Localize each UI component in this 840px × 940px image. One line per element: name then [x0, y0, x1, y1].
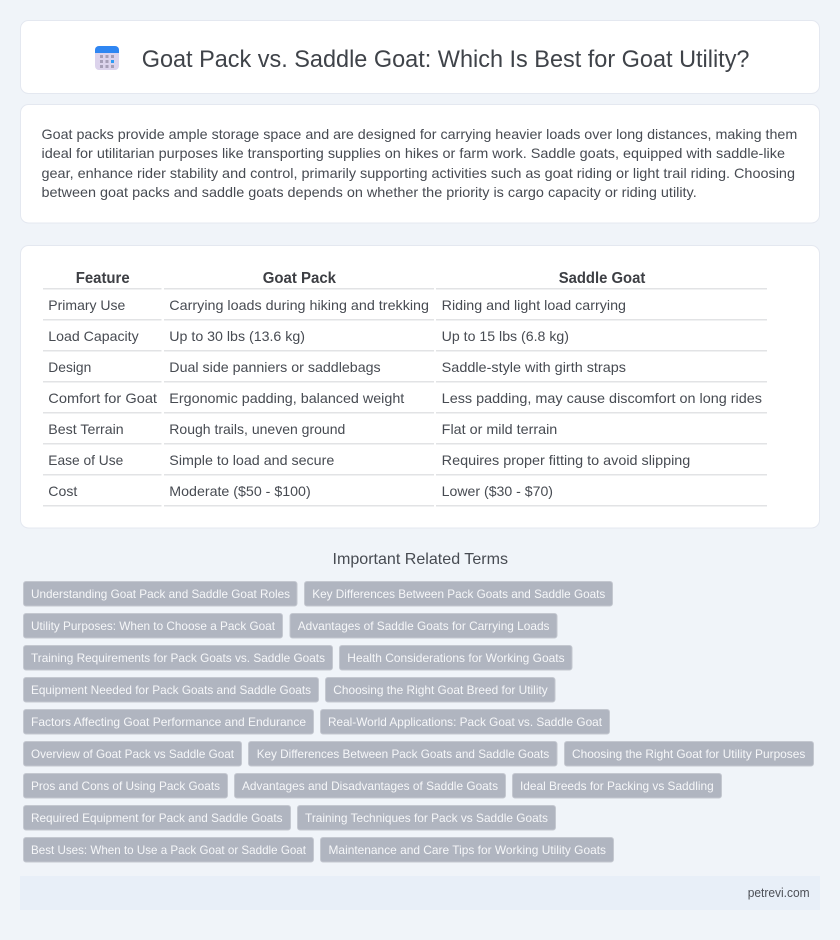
- row: ease of use: Simple to load and secure: [169, 452, 335, 468]
- panel: title header: [20, 20, 820, 94]
- row: comfort for goat: Ergonomic padding, balanced weight: [169, 390, 404, 406]
- tag: Understanding Goat Pack and Saddle Goat Roles: [31, 587, 290, 601]
- tag: [24, 710, 314, 734]
- tag: [24, 806, 290, 830]
- tag: Training Techniques for Pack vs Saddle Goats: [305, 811, 548, 825]
- tag: [24, 838, 314, 862]
- table header row: Goat Pack: [263, 270, 336, 287]
- tag: [24, 646, 332, 670]
- tag: [320, 838, 614, 862]
- row: load capacity: Load Capacity: [48, 328, 139, 344]
- row: load capacity: Up to 15 lbs (6.8 kg): [442, 328, 569, 344]
- tag: [248, 742, 557, 766]
- row: comfort for goat: Less padding, may cause discomfort on long rides: [442, 390, 762, 406]
- row: best terrain: Flat or mild terrain: [442, 421, 557, 437]
- row: cost: [48, 483, 553, 499]
- tag: Pros and Cons of Using Pack Goats: [31, 779, 220, 793]
- intro text: ideal for utilitarian purposes like transporting supplies on hikes or farm work. Saddle goats, equipped with saddle-like: [42, 145, 785, 161]
- footer source text: petrevi.com: [748, 885, 810, 900]
- row: best terrain: Best Terrain: [48, 421, 124, 437]
- row: best terrain: [48, 421, 557, 437]
- row: load capacity: [48, 328, 569, 344]
- row: cost: Moderate ($50 - $100): [169, 483, 311, 499]
- row: design: Saddle-style with girth straps: [442, 359, 626, 375]
- tag: [512, 774, 722, 798]
- row: design: Design: [48, 359, 91, 375]
- intro text: gear, enhance rider stability and control, primarily supporting activities such as goat riding or light trail riding. Choosing: [42, 165, 795, 181]
- tag: Key Differences Between Pack Goats and Saddle Goats: [257, 747, 549, 761]
- row: load capacity: Up to 30 lbs (13.6 kg): [169, 328, 305, 344]
- row: primary use: Riding and light load carrying: [442, 297, 626, 313]
- panel: comparison table: [20, 246, 820, 528]
- icon: calendar: [95, 46, 119, 70]
- tag: [24, 774, 228, 798]
- tag: [298, 806, 556, 830]
- table header row: Saddle Goat: [559, 270, 646, 287]
- row: primary use: Carrying loads during hiking and trekking: [169, 297, 429, 313]
- tag: Factors Affecting Goat Performance and Endurance: [31, 715, 306, 729]
- table header row: [76, 270, 646, 287]
- tag: [564, 742, 814, 766]
- intro text: between goat packs and saddle goats depends on whether the priority is cargo capacity or riding utility.: [42, 184, 697, 200]
- tag: Choosing the Right Goat Breed for Utility: [333, 683, 548, 697]
- footer bar: [20, 876, 820, 910]
- tag: [340, 646, 572, 670]
- tag: [24, 742, 242, 766]
- row: comfort for goat: Comfort for Goat: [48, 390, 157, 406]
- tag: Training Requirements for Pack Goats vs. Saddle Goats: [31, 651, 325, 665]
- row: cost: Lower ($30 - $70): [442, 483, 553, 499]
- tag: Advantages of Saddle Goats for Carrying Loads: [298, 619, 550, 633]
- tag: [24, 582, 297, 606]
- tag: Overview of Goat Pack vs Saddle Goat: [31, 747, 235, 761]
- tag: Ideal Breeds for Packing vs Saddling: [520, 779, 714, 793]
- row: primary use: Primary Use: [48, 297, 126, 313]
- heading: important related terms: Important Related Terms: [332, 551, 508, 568]
- tag: Choosing the Right Goat for Utility Purposes: [572, 747, 805, 761]
- tag: [326, 678, 555, 702]
- tag: [24, 614, 282, 638]
- tag: [24, 678, 318, 702]
- panel: intro paragraph: [20, 104, 820, 223]
- tag: Best Uses: When to Use a Pack Goat or Saddle Goat: [31, 843, 307, 857]
- row: design: [48, 359, 626, 375]
- row: ease of use: Requires proper fitting to avoid slipping: [442, 452, 690, 468]
- tag: [290, 614, 557, 638]
- tag: Key Differences Between Pack Goats and Saddle Goats: [312, 587, 605, 601]
- row: best terrain: Rough trails, uneven ground: [169, 421, 345, 437]
- tag: Real-World Applications: Pack Goat vs. Saddle Goat: [328, 715, 603, 729]
- title: Goat Pack vs. Saddle Goat: Which Is Best for Goat Utility?: [142, 46, 749, 73]
- tag: Required Equipment for Pack and Saddle Goats: [31, 811, 282, 825]
- tag: Equipment Needed for Pack Goats and Saddle Goats: [31, 683, 311, 697]
- row: design: Dual side panniers or saddlebags: [169, 359, 381, 375]
- tag: [304, 582, 612, 606]
- row: ease of use: [48, 452, 690, 468]
- tag: Health Considerations for Working Goats: [347, 651, 565, 665]
- row: comfort for goat: [48, 390, 762, 406]
- row: cost: Cost: [48, 483, 77, 499]
- tag: Utility Purposes: When to Choose a Pack Goat: [31, 619, 276, 633]
- intro text: Goat packs provide ample storage space and are designed for carrying heavier loads over long distances, making them: [42, 126, 797, 142]
- tag: [320, 710, 610, 734]
- tag: Advantages and Disadvantages of Saddle Goats: [242, 779, 498, 793]
- intro text: [42, 126, 797, 200]
- table header row: Feature: [76, 270, 130, 287]
- tag: [234, 774, 506, 798]
- tag: Maintenance and Care Tips for Working Utility Goats: [328, 843, 606, 857]
- related terms tags: [24, 582, 814, 862]
- row: ease of use: Ease of Use: [48, 452, 124, 468]
- row: primary use: [48, 297, 626, 313]
